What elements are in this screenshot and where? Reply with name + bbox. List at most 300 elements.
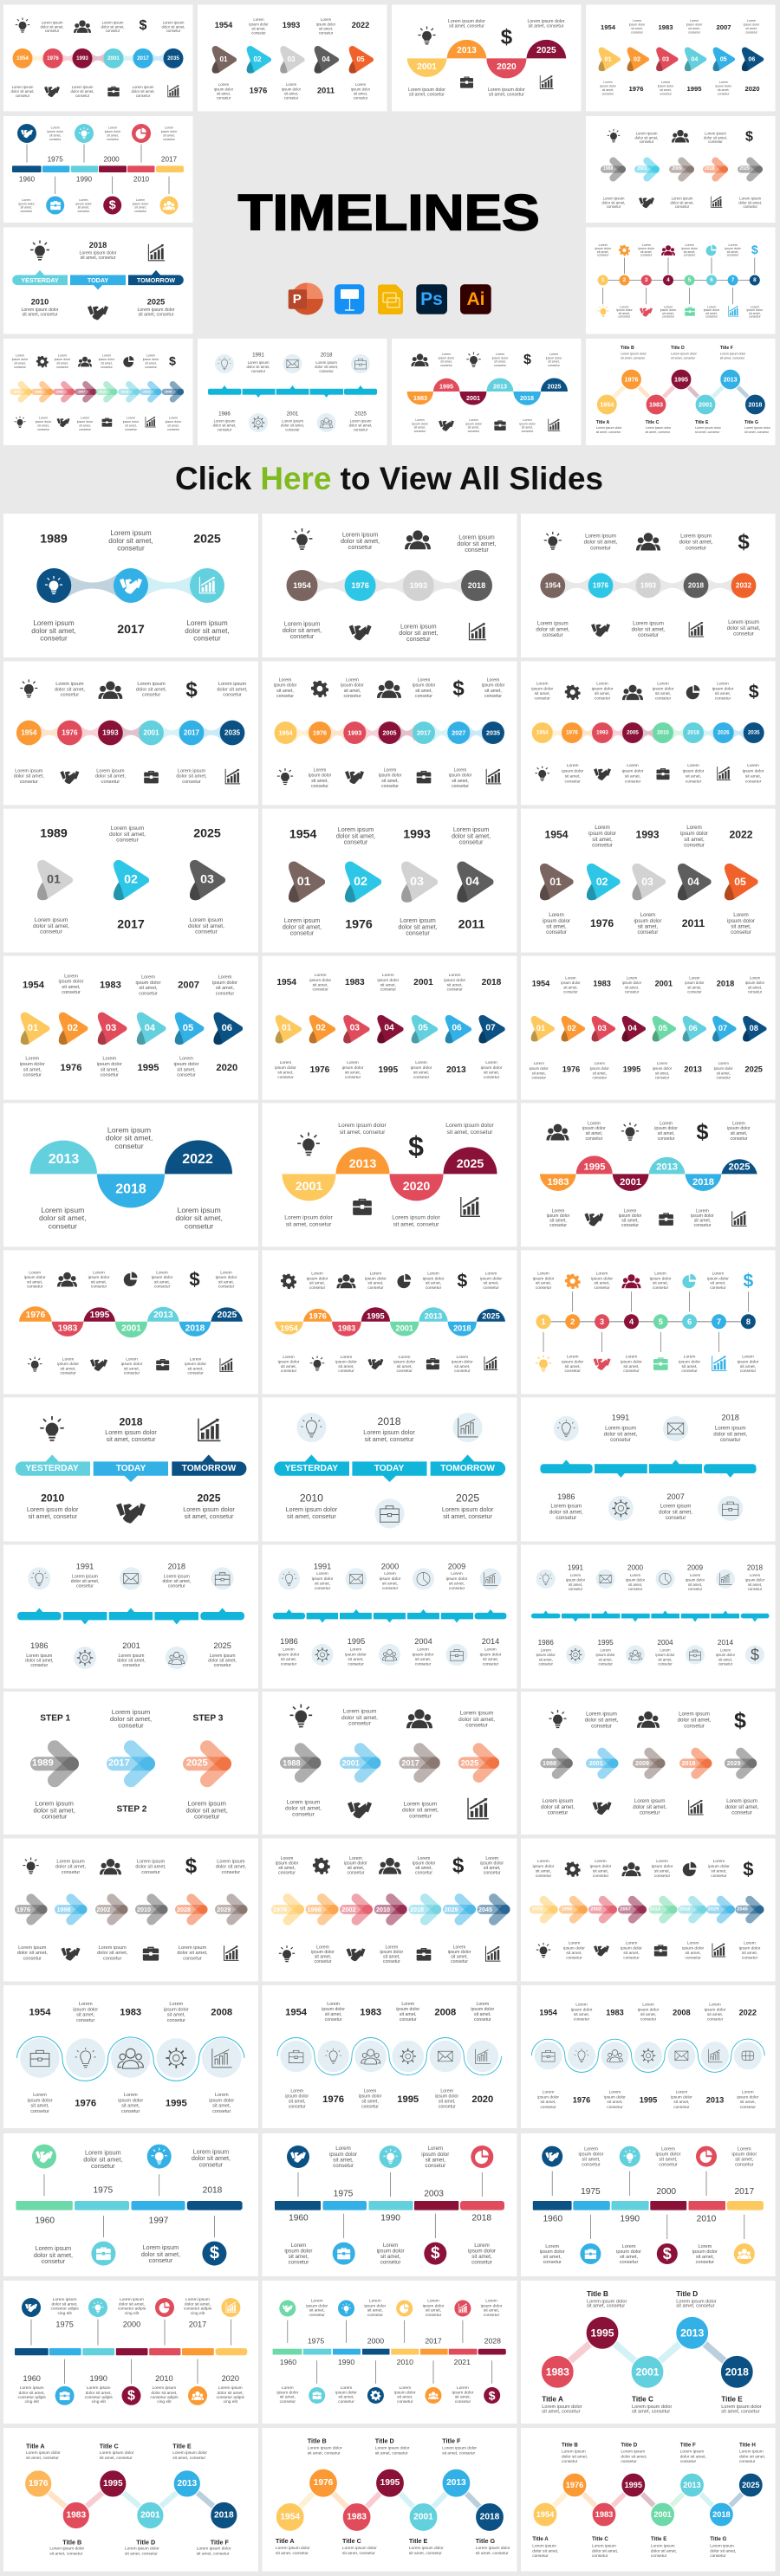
bottom row: sit amet, — [315, 1954, 331, 1959]
bottom row — [27, 1492, 235, 1524]
top row: ipsum dolor — [595, 247, 612, 250]
top row: ipsum dolor — [423, 2303, 445, 2308]
bottom row: 2010 — [300, 1492, 323, 1504]
bottom row: ipsum dolor — [97, 1062, 122, 1067]
bottom row: consetur — [218, 427, 232, 431]
captions: dolor sit amet, — [39, 1214, 87, 1222]
timeline circles: 1976 — [47, 55, 59, 61]
bottom row: Lorem ipsum — [282, 419, 303, 423]
bottom row: ipsum dolor — [121, 1362, 143, 1367]
bottom row: dolor sit amet, — [86, 2390, 112, 2395]
bottom row: 1976 — [590, 917, 614, 929]
top row: 2009 — [687, 1563, 704, 1571]
bottom row: dolor sit amet, — [19, 2390, 45, 2395]
bottom row: Lorem — [474, 2243, 490, 2249]
bottom row: sit amet, — [483, 1657, 498, 1662]
bottom row: 1976 — [75, 2098, 96, 2108]
timeline circles: 2001 — [107, 55, 120, 61]
top titles: Lorem ipsum dolor — [676, 2299, 717, 2304]
top row: 2018 — [377, 1415, 401, 1427]
chevrons: 2029 — [727, 1759, 741, 1767]
icon: dollar: $ — [408, 1130, 424, 1162]
icon: table outline — [742, 2051, 754, 2061]
triangles: 03 — [410, 875, 424, 889]
bottom row: ipsum dolor — [278, 1652, 300, 1657]
top row: Lorem ipsum dolor — [105, 1428, 157, 1436]
panel: preview 5, bar with pins — [3, 116, 192, 223]
bar — [274, 1454, 505, 1482]
icon: bulb — [16, 17, 29, 33]
bottom row: dolor sit amet, — [176, 774, 207, 780]
bottom row: dolor sit amet, — [738, 200, 762, 204]
top row: 1954 — [289, 828, 316, 842]
zigzag circles: 1954 — [600, 400, 614, 409]
top row: Lorem — [633, 19, 641, 23]
top row: sit amet, — [655, 691, 671, 696]
bottom row: Lorem — [751, 305, 759, 308]
top row: sit amet, — [101, 362, 113, 366]
bar — [17, 1608, 244, 1624]
top row — [544, 530, 750, 554]
top row: Lorem ipsum — [120, 2298, 144, 2302]
bottom row: consetur — [556, 1515, 576, 1521]
top row icons and captions: Lorem ipsum — [102, 21, 123, 25]
bottom row: dolor sit amet, — [536, 626, 570, 632]
wave: 2001 — [417, 62, 437, 72]
top row: consetur — [62, 1870, 80, 1875]
bottom titles: Lorem ipsum — [532, 2545, 556, 2548]
bottom row — [600, 81, 760, 96]
bottom row: ipsum dolor — [379, 773, 402, 779]
top titles: sit amet, consetur — [587, 2304, 625, 2309]
top row: Lorem — [51, 126, 60, 129]
bottom titles: Title D — [136, 2538, 155, 2547]
bottom row: consetur — [361, 2104, 379, 2109]
bottom row: dolor sit amet, — [402, 1807, 439, 1813]
wave: 1983 — [548, 1177, 569, 1188]
wave: 2025 — [218, 1311, 237, 1320]
triangles: 02 — [68, 1023, 78, 1033]
top row: dolor sit amet, — [584, 539, 618, 545]
top row: ipsum dolor — [626, 1577, 646, 1582]
top row: dolor sit amet, — [315, 365, 338, 369]
bottom row: ipsum dolor — [716, 1653, 736, 1657]
triangles: 07 — [485, 1024, 496, 1033]
wave: 1995 — [584, 1162, 605, 1172]
bottom row: Lorem — [485, 1061, 497, 1065]
zigzag circles: 1983 — [649, 400, 663, 409]
top row: consetur — [107, 138, 120, 141]
top row — [279, 2299, 503, 2346]
bottom row — [284, 2213, 496, 2265]
top row: ipsum dolor — [143, 358, 159, 361]
zigzag circles: 1976 — [314, 2478, 334, 2488]
bottom row: Lorem — [457, 2386, 469, 2391]
bottom row: 1976 — [310, 1065, 330, 1075]
top row: Lorem — [327, 2002, 340, 2007]
icon: briefcase — [143, 1947, 159, 1961]
bottom row: 2025 — [213, 1641, 231, 1650]
top row: Lorem ipsum — [112, 1708, 150, 1716]
top row: dolor sit amet, — [246, 365, 270, 369]
icon: dollar: $ — [109, 198, 116, 212]
top row: 1983 — [120, 2008, 141, 2018]
top row: ipsum dolor — [533, 1863, 555, 1868]
top row: consetur — [731, 1136, 748, 1142]
top row: Lorem — [321, 17, 331, 22]
top row: ipsum dolor — [705, 2007, 726, 2012]
bottom row: consetur — [182, 780, 201, 785]
bottom row: sit amet, — [454, 1363, 470, 1369]
bottom row — [549, 1492, 743, 1521]
icon: pie — [400, 2304, 409, 2313]
top row: ipsum dolor — [306, 2303, 328, 2308]
bottom row: consetur — [214, 1663, 231, 1668]
timeline circles — [12, 49, 184, 68]
panel: slide 4, six circles — [3, 661, 258, 805]
bottom row: Lorem — [383, 2243, 398, 2249]
icon: briefcase outline — [354, 359, 367, 369]
numbered line: 4 — [629, 1317, 634, 1326]
timeline: 1976 — [351, 581, 369, 590]
bottom row: dolor sit amet, — [348, 423, 373, 427]
icon: bulb — [310, 1356, 324, 1371]
triangles: 01 — [28, 1023, 38, 1033]
bottom row: 1976 — [322, 2094, 344, 2105]
top row: ipsum dolor — [274, 683, 297, 689]
triangles: 01 — [536, 1024, 545, 1032]
bottom row: Lorem — [169, 416, 178, 419]
bottom row: sit amet, consetur — [286, 1221, 332, 1227]
bottom row: ipsum dolor — [621, 1359, 642, 1364]
icon: Photoshop — [416, 284, 447, 314]
top row: sit amet, — [484, 1280, 499, 1285]
zigzag circles: 1983 — [595, 2510, 613, 2519]
bottom row — [277, 767, 501, 789]
top row: consetur — [348, 542, 373, 551]
bottom titles: Title A — [532, 2536, 549, 2542]
top row: dolor sit amet, — [136, 687, 167, 692]
timeline: 2010 — [657, 730, 669, 736]
bottom row — [285, 1798, 489, 1819]
bottom row: Lorem ipsum — [99, 1945, 127, 1951]
bottom row — [213, 411, 373, 432]
triangles: 08 — [750, 1024, 758, 1032]
icon: handshake — [593, 1802, 612, 1815]
bottom row: dolor sit amet, — [34, 2250, 73, 2258]
bottom row: consetur — [538, 1661, 554, 1666]
bottom row: consetur — [716, 1075, 731, 1079]
top row: sit amet, — [276, 689, 294, 694]
icon: dollar: $ — [452, 677, 465, 701]
bottom row: sit amet, — [658, 1657, 673, 1661]
chevrons — [603, 161, 759, 178]
bottom row: Lorem ipsum dolor — [488, 87, 525, 93]
icon: bulb — [93, 2301, 103, 2313]
triangles — [540, 864, 758, 900]
top row: consetur — [333, 2162, 354, 2168]
bottom row: 2010 — [397, 2358, 413, 2366]
top row: sit amet, — [380, 982, 396, 987]
icon: bulb outline — [218, 358, 231, 370]
pins — [552, 2171, 744, 2239]
segmented bar — [12, 165, 184, 172]
triangles: 04 — [465, 875, 479, 889]
bottom row: consetur — [193, 634, 221, 642]
top row: 2025 — [193, 826, 221, 840]
bottom row: 1990 — [380, 2213, 400, 2223]
bottom row: consetur — [413, 1074, 430, 1079]
bottom row icons and captions — [10, 85, 179, 97]
top row: 2000 — [103, 156, 120, 163]
top row: ipsum dolor — [249, 22, 269, 26]
top row: dolor sit amet, — [704, 135, 727, 139]
bottom row: consetur — [675, 204, 690, 208]
bottom row: Lorem — [190, 1358, 201, 1362]
top row: dolor sit amet, — [110, 1715, 152, 1722]
top row: sit amet, — [447, 982, 463, 987]
bottom row: dolor sit amet, — [97, 1951, 128, 1956]
bottom row: ipsum dolor — [284, 2248, 312, 2254]
bottom row: Lorem — [469, 418, 478, 422]
top row: consetur — [534, 696, 550, 701]
bottom row: sit amet, — [655, 1071, 669, 1075]
chevrons: 2007 — [620, 1906, 631, 1912]
bottom titles: Title E — [409, 2537, 428, 2545]
bottom row — [601, 196, 762, 208]
top row: 1991 — [568, 1563, 584, 1571]
icon: briefcase outline — [289, 2050, 303, 2063]
bottom row: consetur — [439, 2104, 456, 2109]
bottom row — [14, 768, 240, 785]
bottom row: consetur — [638, 632, 659, 638]
icon: pie outline — [660, 1573, 671, 1585]
bottom row — [279, 1945, 500, 1964]
bottom row: consetur — [564, 779, 581, 784]
icon: gear — [565, 1274, 581, 1289]
icon: bulb — [152, 2148, 167, 2165]
top row: Lorem — [418, 1856, 430, 1861]
bottom row: dolor sit amet, — [33, 923, 69, 929]
bottom row: 1990 — [76, 175, 93, 184]
top row: consetur — [548, 364, 561, 367]
bottom row: Lorem ipsum — [33, 619, 75, 627]
bottom row: ipsum dolor — [616, 308, 633, 312]
top row: Lorem ipsum — [193, 2147, 229, 2155]
top row: sit amet, — [745, 27, 757, 30]
icon: bulb — [45, 576, 62, 594]
bottom row: dolor sit amet, — [185, 627, 230, 634]
top row: 2008 — [673, 2008, 691, 2016]
bottom titles — [532, 2536, 736, 2558]
bottom row: sit amet, — [539, 1657, 553, 1661]
top row: Lorem — [738, 2146, 751, 2152]
bottom row: ipsum dolor — [411, 1065, 432, 1071]
chevrons — [13, 385, 180, 399]
top row: sit amet, — [426, 2157, 445, 2163]
bottom row: sit amet, — [338, 2394, 354, 2399]
bottom row: sit amet, — [740, 1363, 756, 1369]
panel: slide 6, eight circles — [521, 661, 776, 805]
timeline — [36, 568, 224, 603]
icon: chart — [689, 622, 704, 638]
bottom row: sit amet, — [289, 2100, 306, 2105]
bottom row: consetur adipis — [18, 2394, 46, 2399]
top row: consetur — [446, 987, 463, 992]
top row: ipsum dolor — [638, 247, 655, 250]
wave: 2013 — [153, 1311, 173, 1320]
top row — [533, 1858, 754, 1880]
icon: bulb outline — [575, 2049, 588, 2062]
top row: ipsum dolor — [24, 1275, 46, 1280]
bottom row: dolor sit amet, — [541, 1803, 575, 1810]
bottom row icons and captions: dolor sit amet, — [71, 89, 94, 94]
top row: dolor sit amet, — [52, 2301, 78, 2307]
bottom titles: Title F — [211, 2538, 229, 2547]
bottom row: consetur — [602, 93, 614, 96]
top row: Lorem — [451, 1572, 463, 1576]
timeline circles: 2017 — [137, 55, 149, 61]
bottom row: ipsum dolor — [704, 308, 720, 312]
bottom row: Lorem ipsum dolor — [22, 307, 58, 313]
top row: consetur — [142, 692, 160, 697]
bottom row: Lorem ipsum — [634, 1798, 666, 1804]
icon: briefcase — [685, 307, 695, 316]
chevrons: 1998 — [308, 1906, 322, 1913]
top row: consetur — [484, 694, 502, 699]
top row: consetur — [223, 692, 242, 697]
captions: consetur — [185, 1221, 213, 1230]
icon: Photoshop: Ps — [420, 289, 443, 309]
panel: preview 1, six circles timeline — [3, 4, 192, 111]
bottom row: sit amet, — [468, 426, 479, 430]
bottom row: consetur — [280, 2398, 296, 2404]
top titles: Lorem ipsum dolor — [442, 2446, 477, 2450]
top row: Lorem — [732, 1121, 745, 1126]
zigzag circles: 1995 — [590, 2327, 614, 2339]
top row: sit amet, — [218, 1279, 234, 1285]
top row: Lorem — [485, 2300, 497, 2304]
icon: chart — [198, 1419, 220, 1441]
captions: Lorem ipsum — [177, 1206, 221, 1214]
timeline: 2035 — [486, 729, 500, 737]
top row: ipsum dolor — [712, 686, 734, 691]
top row: 2000 — [367, 2337, 384, 2346]
zigzag circles — [541, 2316, 753, 2388]
bottom titles — [276, 2537, 510, 2555]
zigzag circles: 1976 — [566, 2481, 583, 2489]
bottom titles: sit amet, consetur — [646, 430, 671, 434]
bottom row: ipsum dolor — [28, 2098, 53, 2103]
top row: consetur — [659, 2162, 678, 2167]
top titles: sit amet, consetur — [671, 357, 696, 360]
bottom row: sit amet, — [381, 779, 399, 784]
bottom row: consetur — [743, 204, 758, 208]
wave: 1976 — [26, 1311, 46, 1320]
timeline: 2027 — [452, 729, 465, 737]
bottom row: 1986 — [30, 1641, 49, 1650]
bottom row: sit amet, — [686, 773, 701, 779]
bottom row: 2014 — [482, 1637, 499, 1646]
top row: 2008 — [211, 2008, 232, 2018]
bottom row: Lorem — [707, 305, 716, 308]
triangles: 01 — [282, 1024, 292, 1033]
bottom row: consetur — [718, 1661, 733, 1666]
icon: bulb — [608, 129, 620, 142]
top row: sit amet, — [484, 689, 502, 694]
wave: 2001 — [395, 1324, 413, 1333]
bottom row: dolor sit amet, — [95, 774, 126, 780]
top row: STEP 1 — [40, 1713, 70, 1724]
top row: 2017 — [189, 2320, 206, 2329]
bottom row: ipsum dolor — [209, 2098, 234, 2103]
bottom row: Lorem — [660, 1647, 671, 1652]
chevrons: 2029 — [708, 1906, 718, 1912]
top row — [215, 17, 369, 35]
timeline: 2005 — [383, 729, 397, 737]
bottom row icons and captions: consetur — [75, 93, 90, 97]
top row: 2018 — [747, 1563, 764, 1571]
bottom row: 2020 — [216, 1063, 237, 1073]
bottom row: dolor sit amet, — [151, 2390, 177, 2395]
icon: people outline — [169, 1652, 185, 1664]
bottom row: sit amet, — [705, 312, 718, 315]
bottom row: consetur — [42, 2257, 66, 2265]
top row: Lorem — [146, 353, 155, 357]
bottom row: sit amet, — [30, 2104, 49, 2109]
panel: slide 8, four triangles — [262, 809, 517, 953]
bottom row: dolor sit amet, — [549, 1509, 583, 1515]
bar — [16, 2201, 243, 2210]
chevrons: 2018 — [121, 390, 128, 393]
top row: consetur — [27, 1284, 43, 1289]
bottom row: Lorem ipsum dolor — [284, 1215, 333, 1221]
top row: ipsum dolor — [152, 1275, 173, 1280]
numbered line: 7 — [717, 1317, 721, 1326]
wave — [275, 1307, 505, 1337]
bottom row: Lorem — [102, 1057, 116, 1062]
top row: consetur — [199, 2160, 224, 2168]
top row: consetur adipis — [50, 2306, 79, 2311]
chevrons: 2029 — [739, 166, 750, 172]
top row: sit amet, — [748, 1582, 762, 1586]
top row: dolor sit amet, — [83, 2155, 122, 2163]
bottom row: ipsum dolor — [393, 1359, 415, 1364]
bottom row: 2004 — [657, 1639, 673, 1647]
bottom row: ipsum dolor — [519, 422, 536, 425]
bottom titles: sit amet, consetur — [476, 2550, 509, 2555]
bottom row: consetur — [124, 1370, 140, 1375]
bottom titles: consetur — [651, 2553, 667, 2558]
bottom row: Lorem — [661, 81, 670, 84]
top row: sit amet, — [569, 1582, 582, 1586]
panel: slide 18, colored numbered dots — [521, 1250, 776, 1394]
chevrons: 2009 — [635, 1759, 649, 1767]
bottom row: sit amet, — [413, 1070, 429, 1075]
top row: Lorem — [349, 1856, 362, 1861]
icon: gear — [281, 1274, 296, 1289]
top row: sit amet, consetur — [449, 23, 484, 29]
bottom row: Lorem ipsum — [119, 1654, 144, 1659]
panel: slide 15, six-part wave — [521, 1103, 776, 1246]
wave: 2025 — [548, 383, 562, 390]
bottom row: consetur — [619, 315, 631, 319]
bottom row: 1976 — [250, 86, 267, 94]
top row: dolor sit amet, — [163, 1579, 191, 1584]
top row: sit amet, — [548, 360, 560, 364]
top titles: consetur — [562, 2458, 578, 2463]
captions: Lorem ipsum — [41, 1206, 84, 1214]
